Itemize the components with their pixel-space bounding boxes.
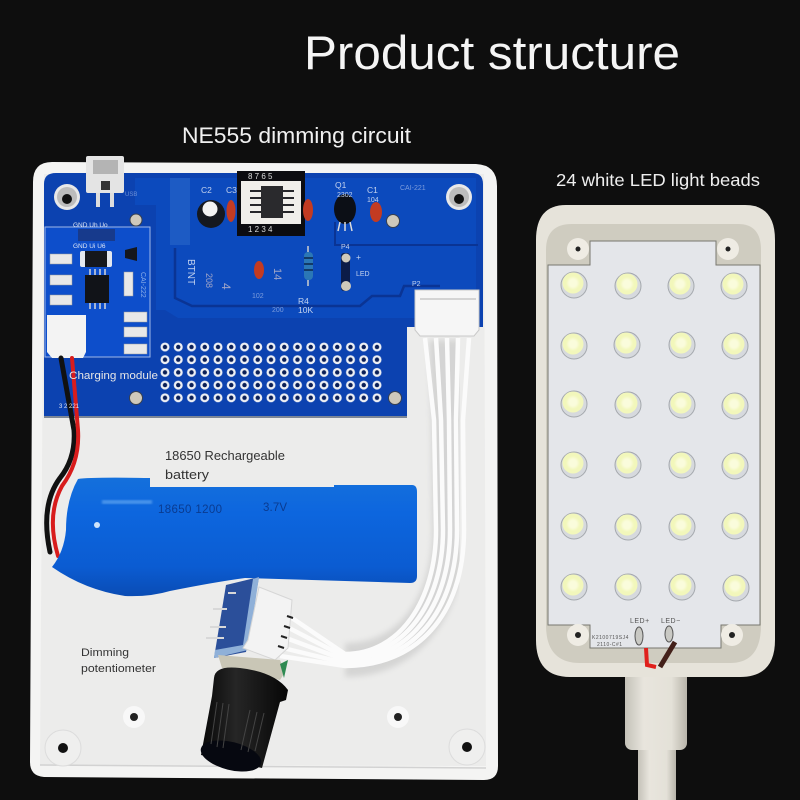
- lamp neck: [625, 670, 687, 750]
- led polarity labels: LED+: [630, 618, 650, 625]
- ne555 chip socket: 1 2 3 4: [248, 225, 273, 234]
- usb port: USB: [125, 192, 137, 198]
- label: charging module: Charging module: [69, 370, 158, 382]
- board connector: [415, 290, 479, 336]
- red and black power wires: [47, 358, 78, 556]
- ne555 chip socket: 8 7 6 5: [248, 172, 273, 181]
- 24 led beads: [561, 272, 749, 601]
- board silk labels: CAI-221: [400, 185, 426, 192]
- board silk labels: +: [356, 252, 361, 262]
- perfboard holes: [158, 341, 384, 404]
- case standoffs: [45, 706, 485, 766]
- led circuit panel: [548, 241, 760, 648]
- knob: [198, 667, 288, 777]
- heading: NE555 dimming circuit: NE555 dimming circuit: [182, 123, 411, 148]
- screws: [130, 214, 402, 404]
- shell screws: [567, 238, 743, 646]
- battery: 3.7V: [263, 502, 287, 514]
- board traces: [135, 178, 476, 318]
- panel: control box: [30, 156, 498, 780]
- solder pads and wires: [635, 626, 675, 667]
- ne555 chip socket: [237, 171, 305, 236]
- charging module: CAI-222: [139, 272, 146, 298]
- charging module: GND Uh Uo: [73, 222, 108, 229]
- board silk labels: 10K: [298, 305, 313, 315]
- gooseneck pipe: [638, 750, 676, 800]
- battery: [52, 478, 417, 596]
- six-strand white ribbon wire: [280, 338, 469, 666]
- board silk labels: [185, 180, 426, 315]
- heading: 24 white LED light beads: 24 white LED light beads: [556, 170, 760, 190]
- label: 18650 rechargeable battery: [165, 449, 285, 482]
- board silk labels: C2: [201, 185, 212, 195]
- board silk labels: LED: [356, 271, 370, 278]
- lamp shell: [536, 205, 775, 677]
- board silk labels: 4: [219, 283, 233, 290]
- board silk labels: 104: [367, 197, 379, 204]
- label: dimming potentiometer: potentiometer: [81, 663, 156, 675]
- board silk labels: Q1: [335, 180, 347, 190]
- board silk labels: P2: [412, 281, 421, 288]
- panel: control box: 3 2 221: [59, 404, 80, 410]
- transistor q1: [334, 194, 356, 231]
- board silk labels: C1: [367, 185, 378, 195]
- board silk labels: 14: [271, 268, 283, 280]
- led polarity labels: [592, 618, 681, 648]
- label: 18650 rechargeable battery: 18650 Rechargeable: [165, 449, 285, 463]
- board silk labels: R4: [298, 296, 309, 306]
- board silk labels: BTNT: [185, 259, 196, 285]
- label: dimming potentiometer: Dimming: [81, 647, 129, 659]
- board silk labels: 208: [204, 273, 214, 288]
- board silk labels: 102: [252, 293, 264, 300]
- board silk labels: C3: [226, 185, 237, 195]
- panel: led lamp head: [536, 205, 775, 800]
- battery: 18650 1200: [158, 504, 222, 516]
- board silk labels: P4: [341, 244, 350, 251]
- led polarity labels: K2100719SJ4: [592, 635, 629, 641]
- enclosure: [30, 162, 498, 780]
- mounting hole left: [54, 184, 80, 210]
- p4 led pads: [341, 253, 351, 291]
- charging module: GND Ui U6: [73, 243, 106, 250]
- led polarity labels: 2110-C#1: [597, 642, 623, 648]
- resistor r4: [304, 246, 313, 286]
- board silk labels: 200: [272, 307, 284, 314]
- circuit board: [44, 156, 483, 556]
- mounting hole right: [446, 184, 472, 210]
- potentiometer: [206, 577, 293, 680]
- charging module: [45, 222, 150, 358]
- capacitor c2: [197, 200, 225, 228]
- led polarity labels: LED−: [661, 618, 681, 625]
- label: 18650 rechargeable battery: battery: [165, 468, 210, 482]
- board silk labels: 2302: [337, 192, 353, 199]
- title: Product structure: [304, 26, 680, 79]
- usb port: [86, 156, 137, 207]
- label: dimming potentiometer: [81, 647, 156, 675]
- ceramic capacitors: [226, 199, 382, 279]
